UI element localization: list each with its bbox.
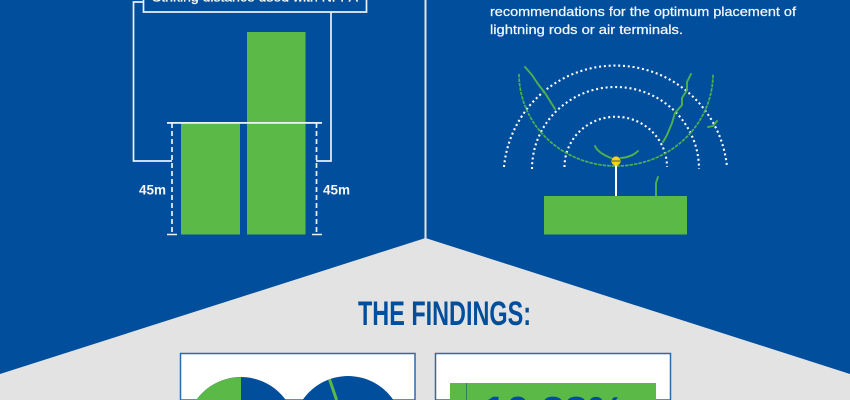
yellow rod tip xyxy=(611,156,621,166)
panel: pie charts xyxy=(180,354,415,400)
short green building xyxy=(181,123,240,234)
white card xyxy=(180,354,415,400)
panel: rolling sphere diagram xyxy=(504,66,727,234)
green percentage band xyxy=(450,383,656,400)
dotted white arcs xyxy=(504,66,727,169)
text block: recommendations: recommendations for the optimum placement of xyxy=(490,4,796,19)
lightning strokes xyxy=(525,67,717,197)
label box: striking distance xyxy=(144,0,366,12)
pie chart one xyxy=(196,377,286,400)
outline bracket around buildings xyxy=(134,2,331,161)
tall green building xyxy=(247,32,306,234)
grey findings section xyxy=(0,238,850,400)
text block: recommendations xyxy=(490,4,796,37)
pie chart two xyxy=(303,376,393,400)
lightning rod xyxy=(615,165,617,197)
text block: recommendations: lightning rods or air terminals. xyxy=(490,22,683,37)
panel: striking distance diagram xyxy=(134,0,366,234)
building block xyxy=(544,196,687,234)
white card xyxy=(436,354,670,400)
green rolling sphere arc xyxy=(519,74,713,166)
left dimension line xyxy=(167,123,177,234)
left 45m label: 45m xyxy=(139,182,166,198)
centre divider xyxy=(424,0,426,240)
right 45m label: 45m xyxy=(323,182,350,198)
right dimension line xyxy=(312,123,322,234)
heading: the findings: THE FINDINGS: xyxy=(358,295,531,333)
band divider xyxy=(466,383,467,400)
horizontal height line xyxy=(167,122,322,124)
panel: percentage figure xyxy=(436,354,670,400)
